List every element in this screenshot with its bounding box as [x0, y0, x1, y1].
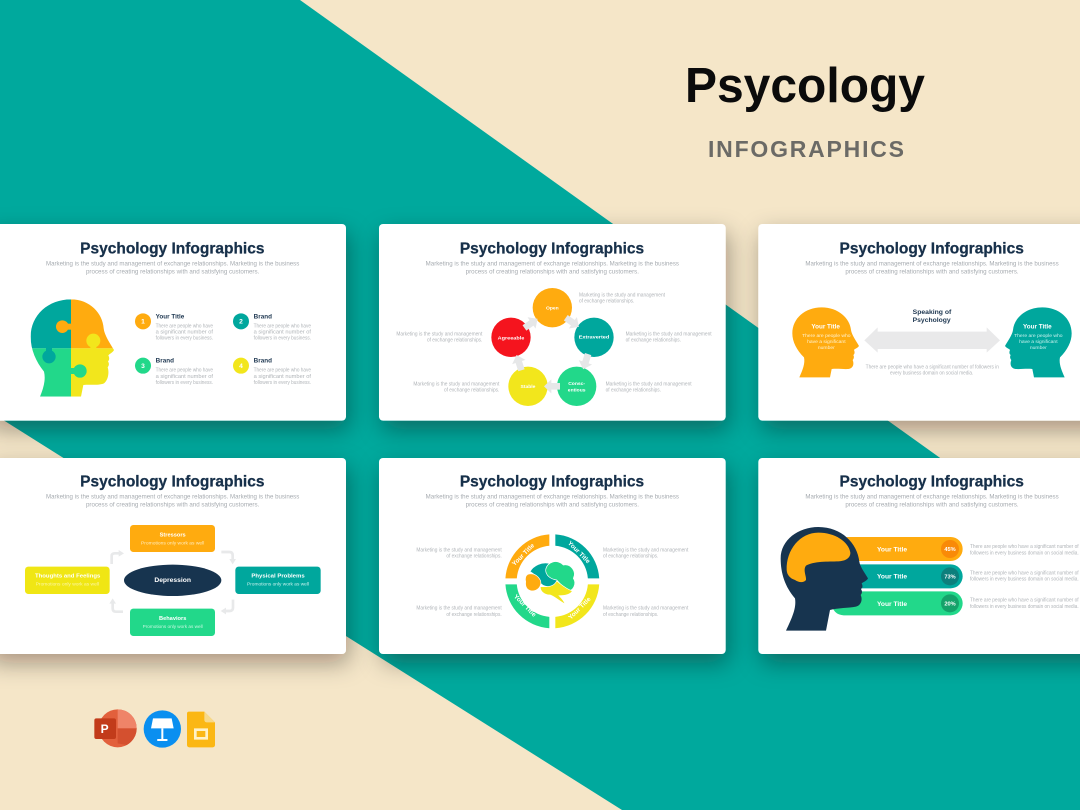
- slide description: Marketing is the study and management of exchange relationships. Marketing is the business: [805, 494, 1059, 501]
- annotation: bottom left: of exchange relationships.: [446, 612, 502, 618]
- item 4: followers in every business.: [254, 380, 311, 386]
- annotation: Conscientious: [606, 381, 692, 393]
- slide description: process of creating relationships with and satisfying customers.: [845, 269, 1019, 276]
- trait: Agreeable: Agreeable: [498, 335, 525, 341]
- slide description: [46, 494, 299, 509]
- item 2: a significant number of: [254, 330, 311, 336]
- item 1: [135, 313, 213, 342]
- bar text: 45%: [970, 544, 1079, 556]
- annotation: bottom left: Marketing is the study and management: [416, 606, 502, 612]
- slide heading: Psychology Infographics: [460, 241, 644, 258]
- box: Physical Problems: Promotions only work as well: [247, 582, 309, 587]
- slide description: Marketing is the study and management of exchange relationships. Marketing is the business: [805, 261, 1059, 268]
- item 4: 4: [239, 363, 243, 370]
- orange head: [792, 307, 859, 377]
- annotation: Agreeable: Marketing is the study and management: [396, 332, 483, 338]
- panel: brain ring slide: [379, 458, 726, 654]
- main title: Psycology: [685, 59, 925, 113]
- item 2: [233, 313, 311, 342]
- arrow label: Psychology: [913, 317, 951, 324]
- teal head: There are people who: [1014, 333, 1063, 339]
- panel: puzzle head slide: [0, 224, 346, 421]
- card background: [758, 224, 1080, 421]
- item 3: [135, 358, 213, 386]
- bar: orange 45%: 45%: [944, 547, 956, 553]
- box: Behaviors: Behaviors: [159, 616, 186, 622]
- box: Stressors: Promotions only work as well: [141, 541, 204, 546]
- card background: [379, 224, 726, 421]
- ring segment: teal: [555, 534, 599, 578]
- annotation: Agreeable: [396, 332, 483, 344]
- teal head: Your Title: [1023, 324, 1052, 331]
- box: Behaviors: [130, 609, 215, 636]
- slide description: [426, 261, 679, 276]
- panel: five traits cycle slide: [379, 224, 726, 421]
- item 1: a significant number of: [156, 330, 213, 336]
- item 1: Your Title: [156, 313, 185, 320]
- icon: brain: [525, 562, 575, 604]
- ring segment: yellow: [555, 584, 599, 628]
- slide description: process of creating relationships with and satisfying customers.: [845, 502, 1019, 509]
- panel: depression diagram slide: [0, 458, 346, 654]
- annotation: bottom right: [603, 606, 689, 618]
- ring segment: orange: Your Title: [511, 542, 537, 568]
- box: Thoughts and Feelings: Promotions only work as well: [36, 582, 99, 587]
- orange head: Your Title: [811, 324, 840, 331]
- item 4: a significant number of: [254, 374, 311, 380]
- box: Behaviors: Promotions only work as well: [143, 624, 203, 629]
- slide description: Marketing is the study and management of exchange relationships. Marketing is the business: [46, 261, 299, 268]
- card background: [0, 458, 346, 654]
- item 1: followers in every business.: [156, 336, 213, 342]
- trait: Extraverted: Extraverted: [579, 334, 609, 340]
- trait: Conscientious: entious: [568, 387, 586, 393]
- bar: orange 45%: [847, 537, 963, 561]
- box: Stressors: [130, 525, 215, 552]
- slide description: [805, 494, 1059, 509]
- item 3: There are people who have: [156, 368, 213, 374]
- bar: teal 73%: [853, 564, 963, 588]
- icon: puzzle head: [30, 299, 114, 397]
- slide description: process of creating relationships with and satisfying customers.: [466, 502, 639, 509]
- item 4: There are people who have: [254, 368, 311, 374]
- slide description: Marketing is the study and management of exchange relationships. Marketing is the business: [46, 494, 299, 501]
- ring segment: teal: Your Title: [566, 540, 592, 566]
- annotation: bottom left: [416, 606, 502, 618]
- icon: Keynote: [144, 710, 181, 748]
- box: Stressors: Stressors: [160, 533, 186, 539]
- arrow label: Speaking of: [913, 309, 952, 316]
- annotation: top right: Marketing is the study and management: [603, 547, 689, 553]
- annotation: Extraverted: [626, 332, 712, 344]
- item 2: followers in every business.: [254, 336, 311, 342]
- box: Physical Problems: Physical Problems: [251, 574, 305, 580]
- annotation: Conscientious: Marketing is the study and management: [606, 381, 692, 387]
- double arrow: [864, 327, 1000, 353]
- annotation: bottom right: Marketing is the study and management: [603, 606, 689, 612]
- slide description: process of creating relationships with and satisfying customers.: [466, 269, 639, 276]
- cycle arrows: [510, 312, 595, 393]
- teal head: have a significant: [1019, 339, 1058, 345]
- slide heading: Psychology Infographics: [80, 241, 265, 258]
- annotation: top right: [603, 547, 689, 559]
- arrow description: There are people who have a significant number of followers in: [866, 364, 999, 370]
- item 1: There are people who have: [156, 323, 213, 329]
- item 3: a significant number of: [156, 374, 213, 380]
- slide heading: Psychology Infographics: [839, 474, 1024, 491]
- item 4: Brand: [254, 358, 272, 365]
- arrow description: [866, 364, 999, 377]
- item 3: followers in every business.: [156, 380, 213, 386]
- item 4: [233, 358, 311, 386]
- annotation: Stable: Marketing is the study and management: [413, 381, 500, 387]
- ring segment: orange: [505, 534, 549, 578]
- icon: Google Slides: [187, 712, 215, 747]
- trait: Stable: [508, 367, 548, 406]
- slide description: [426, 494, 679, 509]
- slide description: Marketing is the study and management of exchange relationships. Marketing is the business: [426, 494, 679, 501]
- annotation: top left: of exchange relationships.: [446, 553, 502, 559]
- ring segment: green: [505, 584, 549, 628]
- bar: orange 45%: Your Title: [877, 546, 907, 553]
- bar: green 20%: 20%: [944, 601, 956, 607]
- trait: Stable: Stable: [521, 384, 536, 390]
- bar: green 20%: [832, 591, 963, 615]
- trait: Open: [533, 288, 572, 327]
- panel: head bars slide: [758, 458, 1080, 654]
- slide heading: Psychology Infographics: [460, 474, 644, 491]
- ring segment: yellow: Your Title: [567, 596, 593, 621]
- item 2: 2: [239, 319, 243, 326]
- annotation: Open: Marketing is the study and management: [579, 293, 665, 299]
- orange head: number: [818, 345, 835, 351]
- bar text: 73%: [970, 570, 1079, 583]
- slide description: [46, 261, 299, 276]
- bar: teal 73%: 73%: [944, 574, 956, 580]
- teal head: number: [1030, 345, 1047, 351]
- annotation: bottom right: of exchange relationships.: [603, 612, 659, 618]
- annotation: Agreeable: of exchange relationships.: [427, 338, 483, 344]
- annotation: Stable: [413, 381, 500, 393]
- annotation: Open: [579, 293, 665, 305]
- card background: [379, 458, 726, 654]
- bar: teal 73%: Your Title: [877, 574, 907, 581]
- icon: PowerPoint: P: [101, 722, 109, 736]
- item 3: Brand: [156, 358, 174, 365]
- annotation: top right: of exchange relationships.: [603, 553, 659, 559]
- app icons row: [94, 709, 215, 748]
- slide heading: Psychology Infographics: [839, 241, 1024, 258]
- card background: [0, 224, 346, 421]
- annotation: top left: [416, 547, 502, 559]
- icon: navy head with brain: [781, 527, 868, 631]
- annotation: top left: Marketing is the study and management: [416, 547, 502, 553]
- teal head: [1005, 307, 1072, 377]
- item 1: 1: [141, 319, 145, 326]
- slide description: process of creating relationships with and satisfying customers.: [86, 502, 260, 509]
- card background: [758, 458, 1080, 654]
- trait: Open: Open: [546, 305, 559, 311]
- item 2: Brand: [254, 313, 272, 320]
- orange head: There are people who: [802, 333, 851, 339]
- item 3: 3: [141, 363, 145, 370]
- slide description: process of creating relationships with and satisfying customers.: [86, 269, 260, 276]
- bar text: 20%: [970, 598, 1079, 610]
- slide description: [805, 261, 1059, 276]
- item 2: There are people who have: [254, 323, 311, 329]
- arrow description: every business domain on social media.: [890, 371, 974, 377]
- trait: Conscientious: Consc-: [568, 381, 585, 387]
- box: Physical Problems: [235, 567, 321, 594]
- bar: green 20%: Your Title: [877, 601, 907, 608]
- slide description: Marketing is the study and management of exchange relationships. Marketing is the business: [426, 261, 679, 268]
- panel: speaking of psychology slide: [758, 224, 1080, 421]
- subtitle: INFOGRAPHICS: [708, 136, 904, 162]
- annotation: Conscientious: of exchange relationships.: [606, 387, 661, 393]
- trait: Agreeable: [491, 318, 531, 357]
- corner arrows: [109, 550, 236, 614]
- slide heading: Psychology Infographics: [80, 474, 265, 491]
- box: Thoughts and Feelings: Thoughts and Feelings: [35, 574, 100, 580]
- annotation: Open: of exchange relationships.: [579, 299, 635, 305]
- center ellipse: Depression: Depression: [154, 577, 191, 584]
- orange head: have a significant: [807, 339, 846, 345]
- trait: Conscientious: [557, 367, 596, 406]
- box: Thoughts and Feelings: [25, 567, 110, 594]
- annotation: Extraverted: of exchange relationships.: [626, 338, 681, 344]
- trait: Extraverted: [574, 318, 614, 357]
- arrow label: [913, 309, 952, 324]
- center ellipse: Depression: [124, 565, 221, 596]
- annotation: Stable: of exchange relationships.: [444, 387, 500, 393]
- annotation: Extraverted: Marketing is the study and management: [626, 332, 712, 338]
- ring segment: green: Your Title: [512, 593, 538, 619]
